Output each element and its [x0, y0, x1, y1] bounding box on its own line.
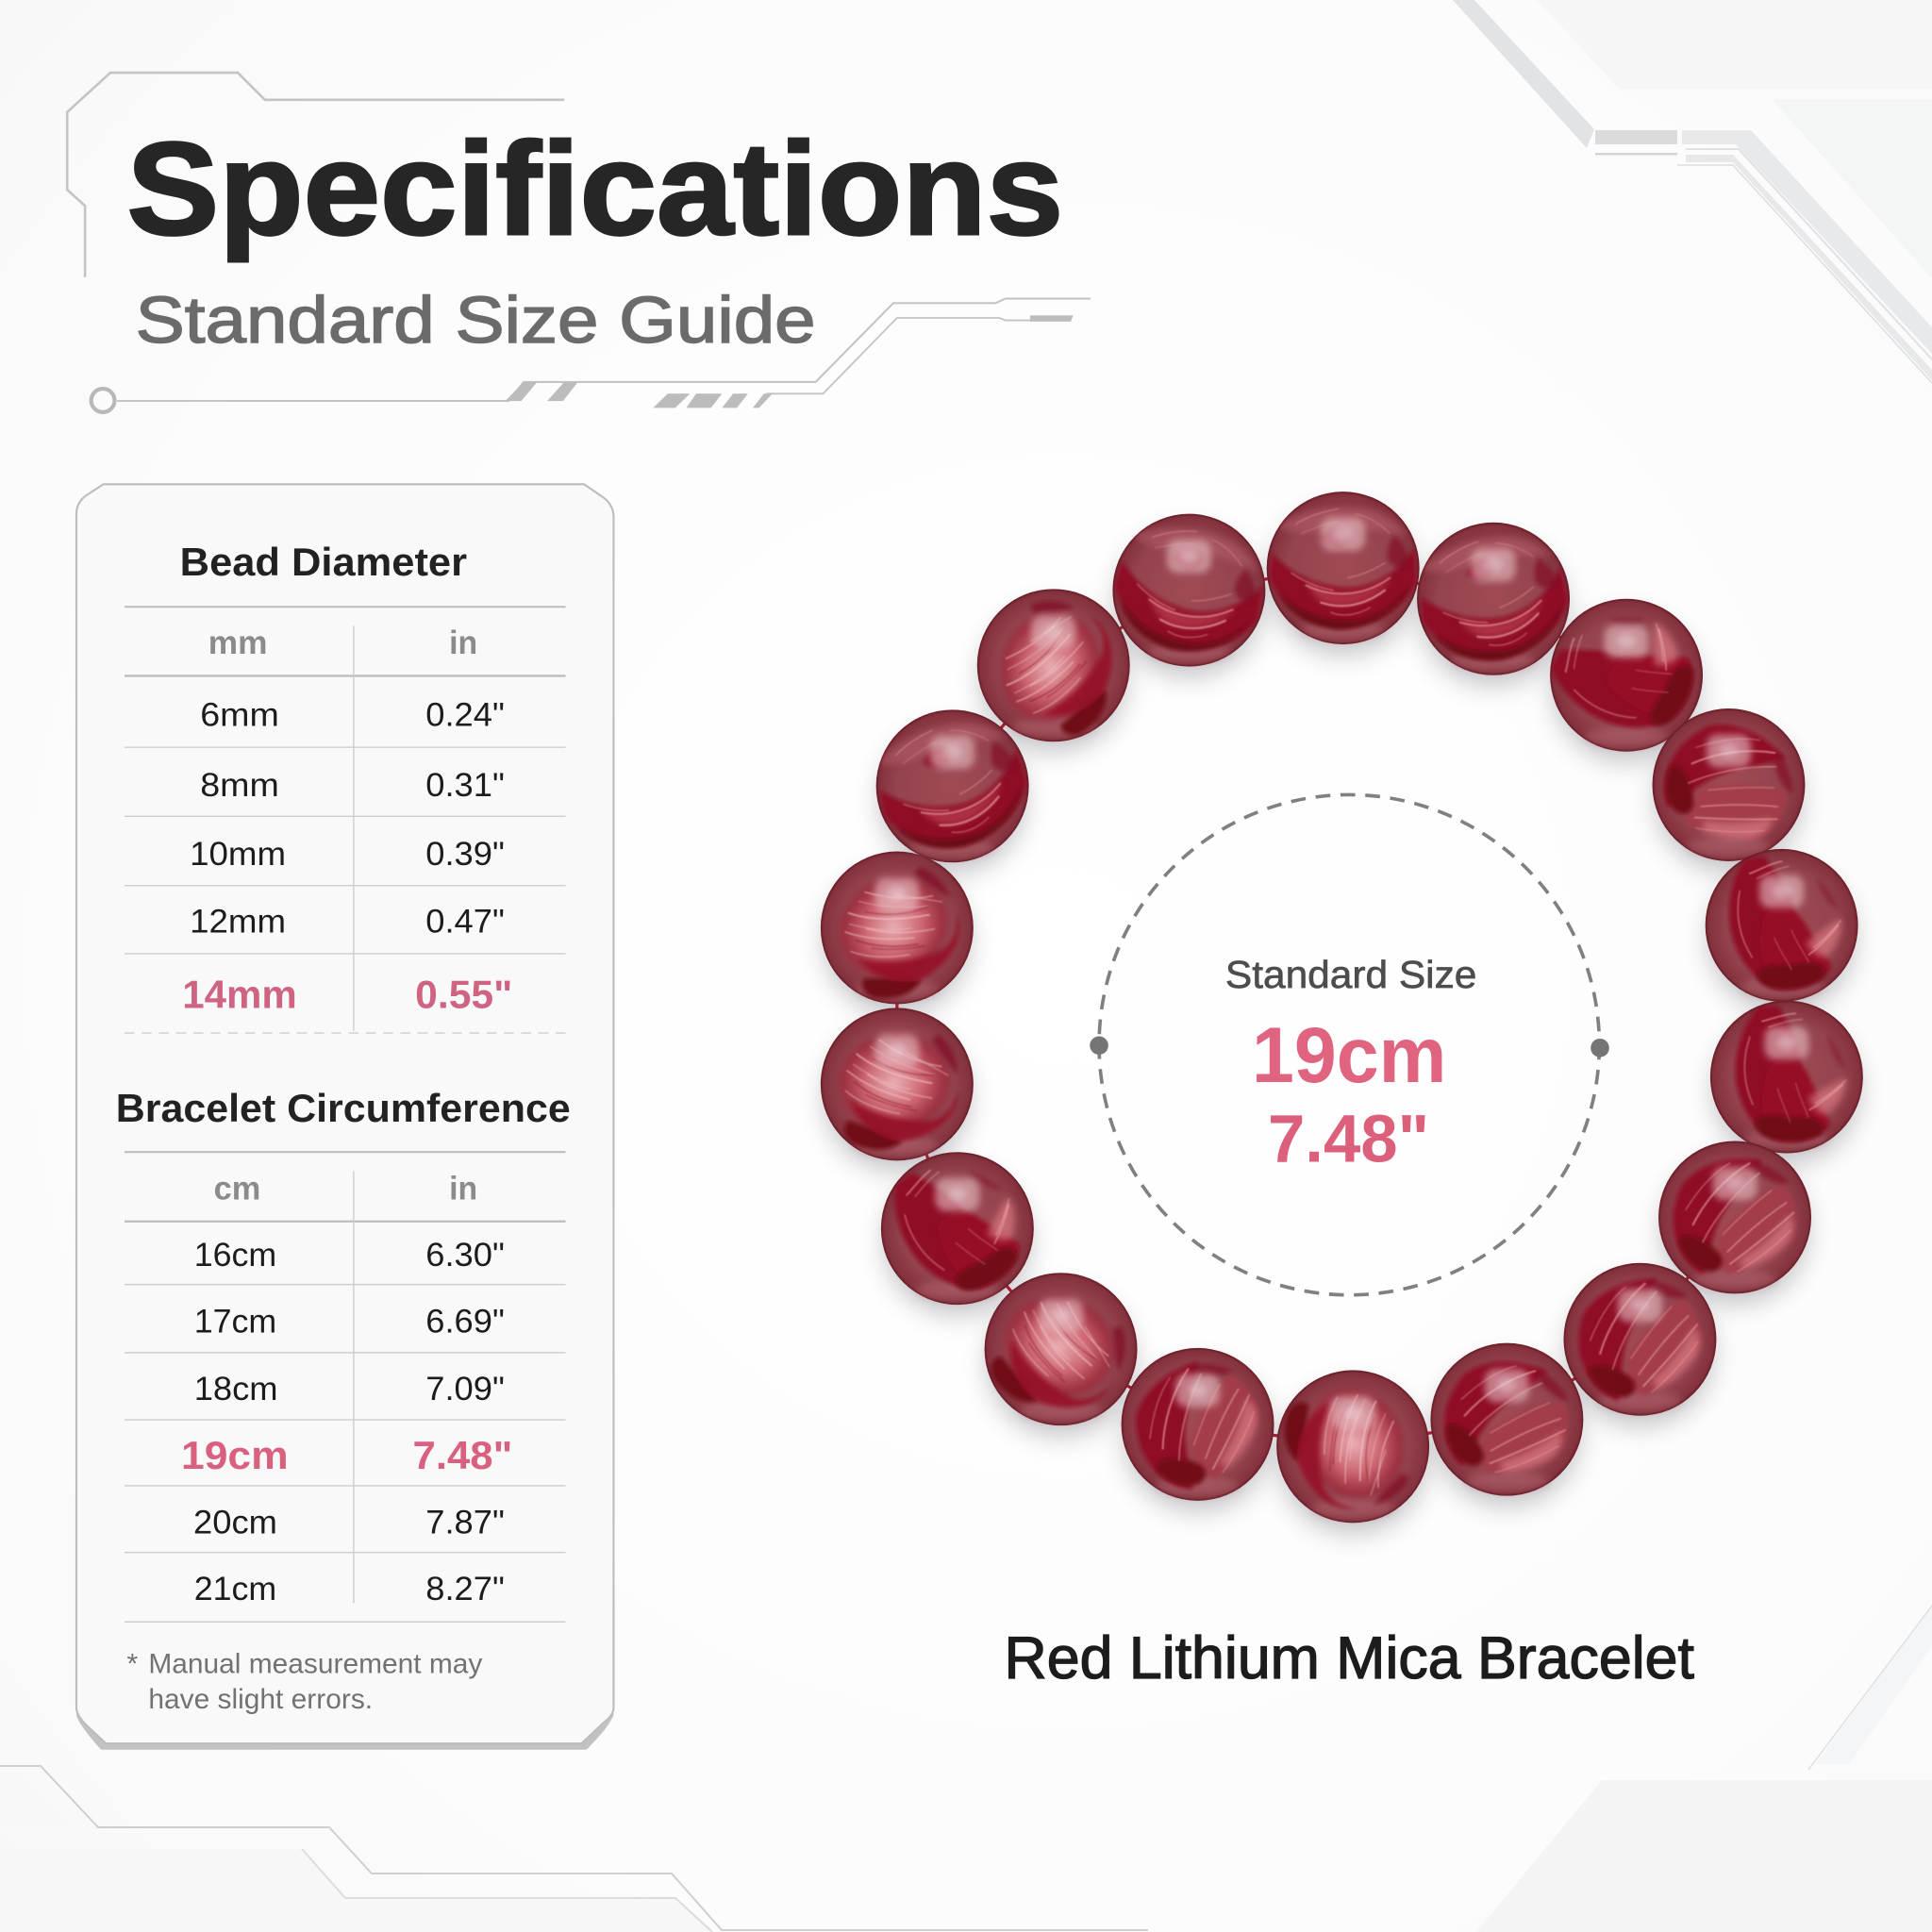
bead 17	[977, 589, 1133, 744]
footnote	[127, 1649, 482, 1715]
footnote: *	[127, 1649, 139, 1680]
heading: Bracelet Circumference	[116, 1086, 571, 1130]
title: Specifications	[127, 114, 1063, 262]
column headers: in	[449, 625, 477, 661]
bead 7	[1658, 1141, 1811, 1293]
bead 12	[982, 1273, 1138, 1428]
value: centimetres: 19cm	[1252, 1010, 1446, 1099]
column headers	[208, 625, 477, 661]
highlighted row: 0.55"	[415, 972, 512, 1016]
bead 13	[880, 1141, 1039, 1309]
rows: 8mm	[200, 767, 279, 804]
bead 8	[1563, 1263, 1716, 1416]
subtitle: Standard Size Guide	[136, 283, 816, 357]
footnote: Manual measurement may	[148, 1649, 482, 1680]
rows: 0.24"	[425, 696, 505, 733]
rows: 17cm	[194, 1304, 276, 1341]
rows: 16cm	[194, 1237, 276, 1274]
bottom left corner panels	[0, 1766, 1148, 1932]
rows: 12mm	[190, 904, 286, 941]
bracelet	[817, 491, 1863, 1534]
bead 4	[1645, 700, 1813, 868]
bead 15	[817, 850, 982, 1012]
value: inches: 7.48"	[1268, 1102, 1429, 1177]
rows: 21cm	[194, 1571, 276, 1607]
rows: 7.09"	[425, 1371, 505, 1407]
bead 1	[1267, 491, 1420, 644]
column headers: cm	[214, 1171, 260, 1208]
rows: 7.87"	[425, 1504, 505, 1541]
bead 2	[1410, 523, 1577, 675]
table: bracelet circumference	[116, 1086, 571, 1622]
header ring node	[92, 389, 114, 412]
column headers: mm	[208, 625, 267, 661]
bead 3	[1540, 587, 1713, 756]
highlighted row	[181, 1433, 512, 1477]
top right corner panels	[1453, 0, 1932, 383]
dashed measuring circle	[1099, 794, 1599, 1295]
rows: 20cm	[193, 1504, 277, 1541]
bead 10	[1274, 1370, 1429, 1526]
panel base edge	[76, 1700, 613, 1750]
header hatch marks	[506, 315, 1074, 408]
label: Standard Size	[1225, 953, 1476, 996]
bead 18	[1104, 514, 1274, 667]
table: bead diameter	[125, 540, 566, 1033]
rows: 10mm	[190, 836, 286, 873]
rows	[190, 696, 505, 941]
table rules	[125, 607, 566, 1033]
header frame lines	[67, 73, 1091, 401]
rows: 18cm	[194, 1371, 278, 1407]
elastic string	[897, 568, 1787, 1446]
footnote: have slight errors.	[148, 1684, 373, 1715]
panel card	[76, 484, 613, 1743]
bottom right corner panels	[1476, 1604, 1932, 1932]
left marker	[1090, 1036, 1108, 1055]
column headers	[214, 1171, 477, 1208]
rows: 6mm	[200, 696, 279, 733]
highlighted row: 14mm	[182, 972, 297, 1016]
panel: size tables	[76, 484, 613, 1750]
table rules	[125, 1152, 566, 1622]
rows: 0.39"	[425, 836, 505, 873]
product name: Red Lithium Mica Bracelet	[1004, 1625, 1694, 1691]
rows	[193, 1237, 505, 1607]
bead 9	[1430, 1343, 1583, 1496]
bead 16	[866, 709, 1040, 865]
heading: Bead Diameter	[180, 540, 467, 584]
rows: 0.31"	[425, 767, 505, 804]
rows: 6.69"	[425, 1304, 505, 1341]
rows: 0.47"	[425, 904, 505, 941]
highlighted row: 7.48"	[413, 1433, 512, 1477]
rows: 6.30"	[425, 1237, 505, 1274]
right marker	[1591, 1039, 1609, 1058]
highlighted row	[182, 972, 512, 1016]
callout: standard size circle	[1090, 794, 1609, 1295]
rows: 8.27"	[425, 1571, 505, 1607]
bead 11	[1117, 1345, 1277, 1502]
column headers: in	[449, 1171, 477, 1208]
bead 6	[1710, 1001, 1863, 1154]
bead 14	[821, 1008, 974, 1160]
bead 5	[1706, 849, 1858, 1002]
bead shadows	[823, 508, 1860, 1534]
highlighted row: 19cm	[181, 1433, 289, 1477]
